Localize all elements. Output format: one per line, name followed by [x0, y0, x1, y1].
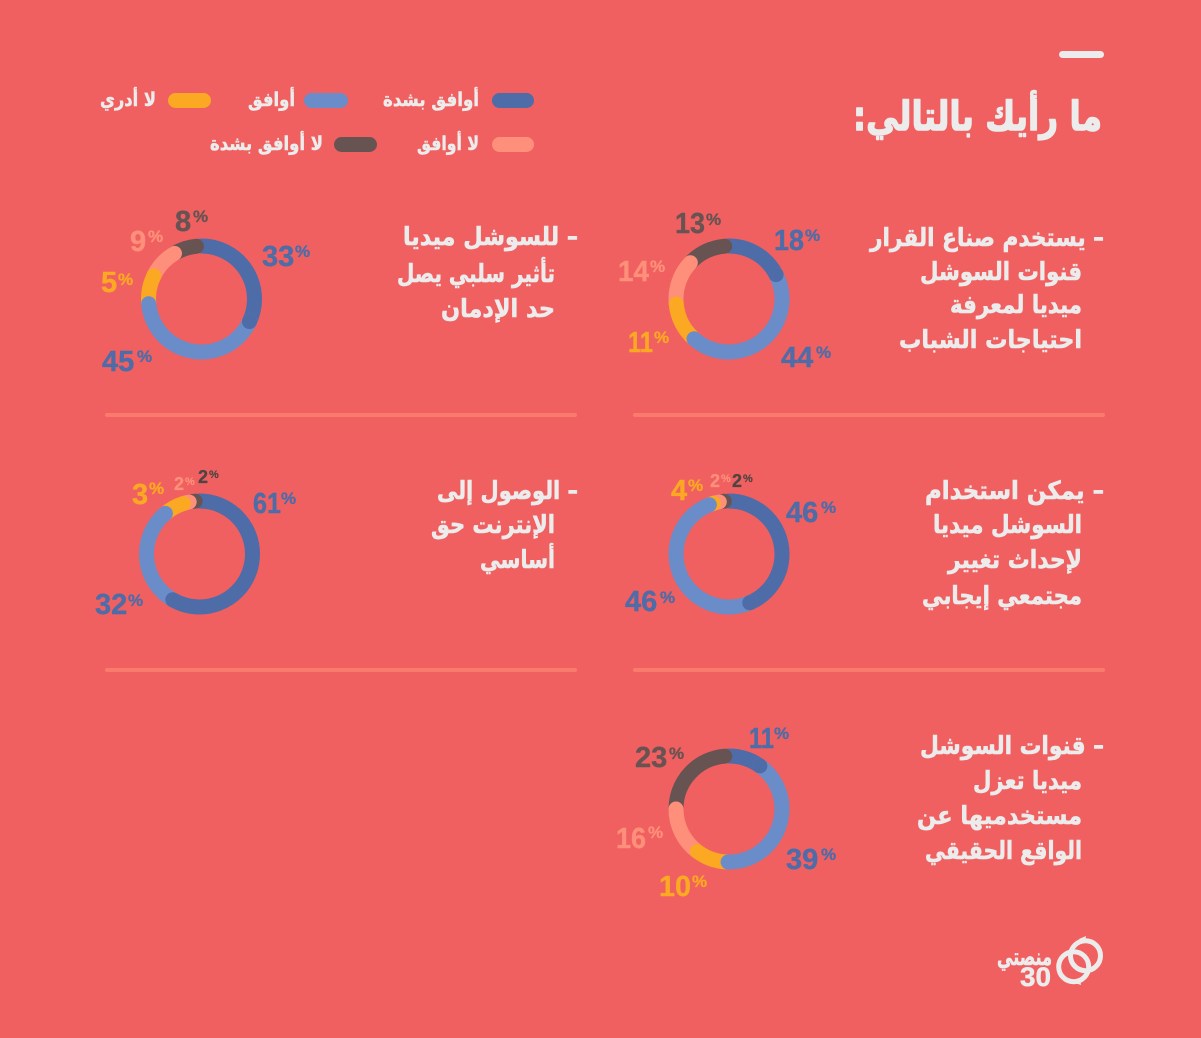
chart 2 values: 5: [101, 267, 117, 299]
chart 2 values: %: [295, 242, 310, 261]
chart 1 values: %: [816, 343, 831, 362]
legend: أوافق: [248, 87, 295, 111]
chart 3 values: %: [743, 473, 753, 485]
chart 4 values: %: [128, 591, 143, 610]
chart 1 values: %: [706, 210, 721, 229]
chart 5 values: 39: [786, 844, 818, 876]
chart 1 values: %: [805, 226, 820, 245]
statement 5: الواقع الحقيقي: [925, 836, 1082, 866]
chart 4 values: %: [209, 469, 219, 481]
chart 1 values: %: [650, 257, 665, 276]
statement 1: [868, 223, 1104, 354]
title: ما رأيك بالتالي:: [853, 90, 1102, 140]
statement 1: قنوات السوشل: [920, 257, 1082, 287]
chart 2 values: %: [193, 207, 208, 226]
chart 4 values: 61: [253, 488, 281, 520]
chart 4 values: [95, 467, 296, 621]
chart 2 values: 9: [130, 226, 146, 258]
chart 5 values: %: [648, 823, 663, 842]
statement 3: – يمكن استخدام: [925, 476, 1104, 506]
statement 2: تأثير سلبي يصل: [397, 257, 555, 289]
top accent bar: [1059, 51, 1104, 58]
chart 5 values: %: [669, 744, 684, 763]
donut chart 1: [654, 224, 804, 374]
statement 4: الإنترنت حق: [431, 510, 555, 540]
chart 4 values: %: [281, 489, 296, 508]
chart 5 values: %: [692, 872, 707, 891]
donut chart 4: [125, 479, 274, 629]
chart 5 values: 10: [659, 871, 691, 903]
chart 5 values: 23: [635, 742, 667, 774]
chart 5 values: 11: [749, 723, 774, 755]
chart 1 values: 44: [781, 342, 813, 374]
logo: [997, 936, 1100, 992]
chart 4 values: 2: [198, 467, 208, 487]
donut chart 3: [659, 484, 799, 624]
statement 5: مستخدميها عن: [917, 801, 1082, 831]
statement 1: ميديا لمعرفة: [950, 290, 1082, 320]
statement 1: – يستخدم صناع القرار: [868, 223, 1104, 253]
chart 1 values: 13: [675, 208, 705, 240]
chart 4 values: 32: [95, 589, 127, 621]
chart 2 values: %: [137, 347, 152, 366]
chart 3 values: %: [821, 498, 836, 517]
chart 3 values: [625, 471, 836, 618]
statement 3: [922, 476, 1104, 610]
chart 5 values: 16: [616, 823, 646, 855]
chart 3 values: %: [660, 588, 675, 607]
chart 3 values: 4: [671, 475, 687, 507]
legend: لا أوافق بشدة: [210, 131, 323, 155]
chart 3 values: 46: [625, 586, 657, 618]
statement 3: لإحداث تغيير: [946, 545, 1082, 575]
chart 4 values: 3: [132, 479, 148, 511]
chart 2 values: %: [148, 227, 163, 246]
chart 1 values: 11: [628, 327, 653, 359]
chart 2 values: 33: [262, 241, 294, 273]
statement 5: [917, 731, 1104, 866]
chart 5 values: %: [774, 724, 789, 743]
chart 1 values: 18: [774, 225, 804, 257]
chart 3 values: 2: [732, 471, 742, 491]
chart 2 values: [101, 206, 310, 378]
statement 4: [431, 476, 578, 574]
chart 1 values: %: [654, 328, 669, 347]
divider: [105, 668, 577, 672]
chart 4 values: %: [149, 479, 164, 498]
statement 3: مجتمعي إيجابي: [922, 581, 1082, 610]
donut chart 5: [655, 735, 803, 883]
chart 2 values: %: [118, 270, 133, 289]
divider: [105, 413, 577, 417]
statement 4: – الوصول إلى: [437, 476, 578, 506]
chart 2 values: 8: [175, 206, 191, 238]
chart 2 values: 45: [102, 346, 134, 378]
legend: أوافق بشدة: [383, 87, 479, 111]
statement 5: – قنوات السوشل: [920, 731, 1104, 761]
divider: [633, 668, 1105, 672]
chart 3 values: 46: [786, 497, 818, 529]
statement 2: [397, 222, 578, 323]
statement 3: السوشل ميديا: [933, 510, 1082, 540]
chart 1 values: 14: [618, 256, 649, 288]
divider: [633, 413, 1105, 417]
statement 4: أساسي: [480, 543, 555, 574]
statement 2: – للسوشل ميديا: [403, 222, 578, 252]
legend: لا أدري: [100, 87, 156, 112]
logo: 30: [1020, 962, 1051, 992]
logo: منصتي: [997, 943, 1052, 971]
chart 3 values: 2: [710, 471, 720, 491]
chart 5 values: %: [821, 845, 836, 864]
chart 1 values: [618, 208, 831, 374]
legend: لا أوافق: [417, 131, 479, 155]
chart 4 values: 2: [174, 474, 184, 494]
chart 3 values: %: [721, 473, 731, 485]
chart 4 values: %: [185, 476, 195, 488]
statement 5: ميديا تعزل: [973, 766, 1082, 796]
chart 3 values: %: [688, 476, 703, 495]
statement 2: حد الإدمان: [441, 294, 555, 323]
legend: [100, 87, 534, 155]
statement 1: احتياجات الشباب: [899, 325, 1082, 354]
donut chart 2: [129, 226, 274, 372]
chart 5 values: [616, 723, 836, 903]
